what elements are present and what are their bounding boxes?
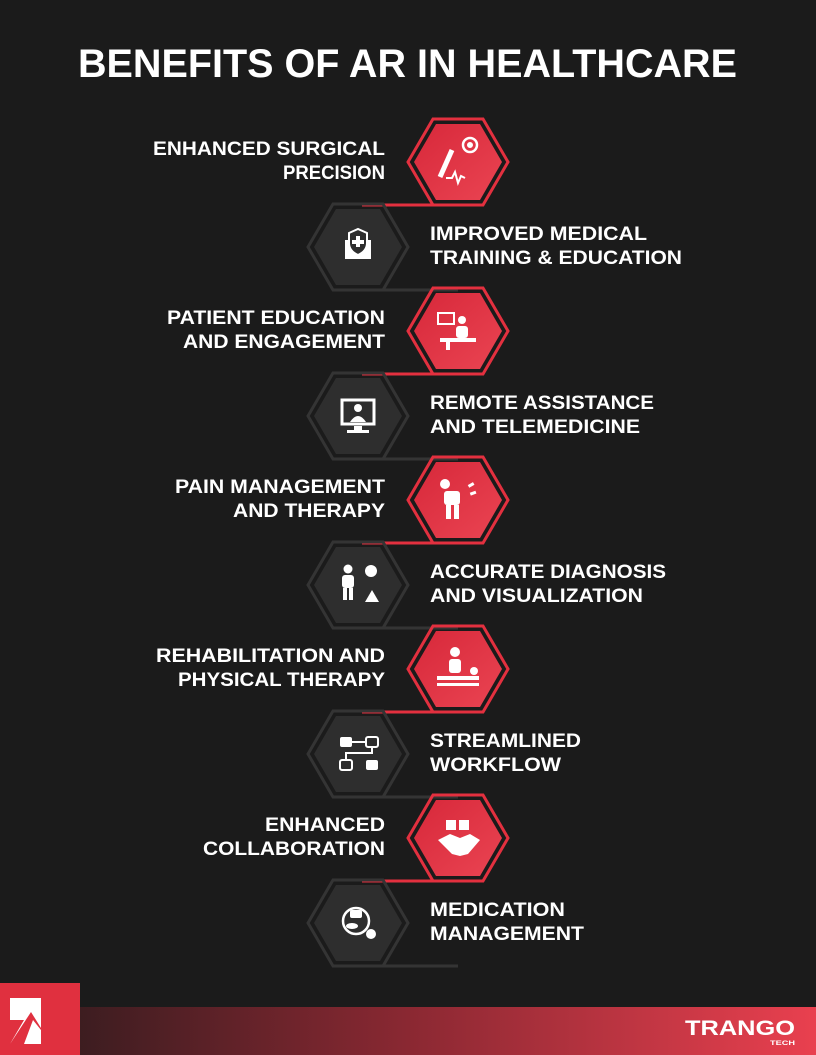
icon: workflow boxes <box>340 737 378 770</box>
row 5: pain management <box>175 457 508 543</box>
icon: handshake puzzle <box>438 820 480 856</box>
row 9: enhanced collaboration: ENHANCED <box>265 815 385 836</box>
row 1: enhanced surgical precision <box>153 119 508 205</box>
row 1: enhanced surgical precision: PRECISION <box>283 163 385 184</box>
row 7: rehabilitation: REHABILITATION AND <box>156 646 385 667</box>
row 5: pain management: PAIN MANAGEMENT <box>175 477 385 498</box>
row 2: improved medical training: TRAINING & EDUCATION <box>430 248 682 269</box>
row 4: remote assistance: AND TELEMEDICINE <box>430 417 640 438</box>
brand: trango tech: TRANGO <box>685 1017 795 1040</box>
title: BENEFITS OF AR IN HEALTHCARE <box>78 42 737 86</box>
row 5: pain management: AND THERAPY <box>233 501 385 522</box>
icon: patient on screen <box>438 313 476 350</box>
icon: scalpel and target <box>440 138 477 183</box>
row 10: medication management <box>308 880 584 966</box>
row 6: accurate diagnosis: ACCURATE DIAGNOSIS <box>430 562 666 583</box>
icon: monitor with doctor <box>342 400 374 433</box>
row 2: improved medical training <box>308 204 682 290</box>
icon: person with plus and warning <box>342 564 379 602</box>
row 2: improved medical training: IMPROVED MEDICAL <box>430 224 647 245</box>
row 10: medication management: MANAGEMENT <box>430 924 584 945</box>
row 3: patient education: AND ENGAGEMENT <box>183 332 385 353</box>
row 4: remote assistance: REMOTE ASSISTANCE <box>430 393 654 414</box>
row 8: streamlined workflow: STREAMLINED <box>430 731 581 752</box>
row 9: enhanced collaboration <box>203 795 508 881</box>
row 4: remote assistance <box>308 373 654 459</box>
row 7: rehabilitation: PHYSICAL THERAPY <box>178 670 385 691</box>
row 6: accurate diagnosis <box>308 542 666 628</box>
row 6: accurate diagnosis: AND VISUALIZATION <box>430 586 643 607</box>
icon: person with back pain <box>440 479 476 519</box>
icon: pills with gear <box>343 908 376 939</box>
row 3: patient education <box>167 288 508 374</box>
brand: trango tech <box>685 1017 795 1047</box>
row 8: streamlined workflow: WORKFLOW <box>430 755 561 776</box>
row 7: rehabilitation <box>156 626 508 712</box>
icon: shield and book <box>345 229 371 259</box>
row 1: enhanced surgical precision: ENHANCED SURGICAL <box>153 139 385 160</box>
logo mark <box>0 983 80 1055</box>
row 10: medication management: MEDICATION <box>430 900 565 921</box>
footer bar <box>0 1007 816 1055</box>
icon: physiotherapist and patient <box>437 647 479 686</box>
brand: trango tech: TECH <box>770 1041 795 1047</box>
row 8: streamlined workflow <box>308 711 581 797</box>
row 3: patient education: PATIENT EDUCATION <box>167 308 385 329</box>
row 9: enhanced collaboration: COLLABORATION <box>203 839 385 860</box>
